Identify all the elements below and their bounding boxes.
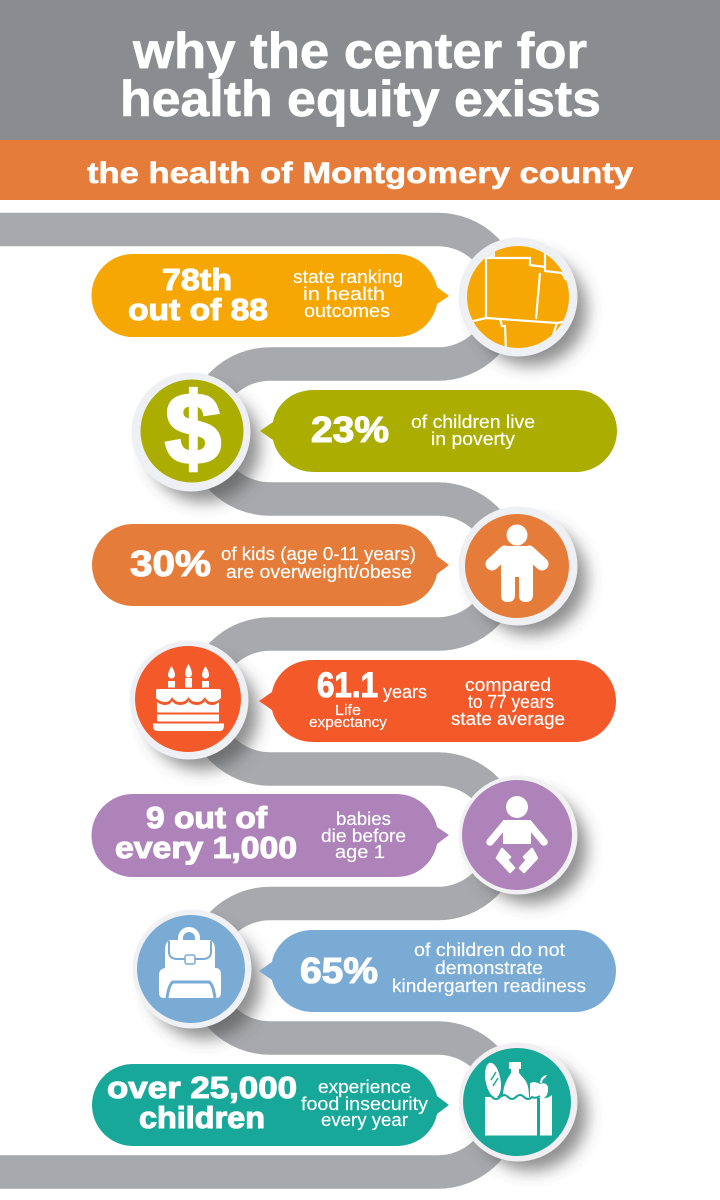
icon: child <box>458 506 578 626</box>
panel: infant mortality: babies <box>336 809 391 829</box>
panel: child poverty: 23% <box>311 409 389 450</box>
panel: infant mortality: die before <box>321 826 406 846</box>
panel: life expectancy: expectancy <box>309 714 388 731</box>
panel: food insecurity <box>92 1064 449 1146</box>
panel: life expectancy: Life <box>335 702 361 719</box>
panel: state ranking: outcomes <box>304 301 390 321</box>
panel: infant mortality <box>92 794 449 877</box>
panel: overweight kids <box>92 524 449 606</box>
header: title band: why the center for <box>132 23 587 79</box>
panel: child poverty: in poverty <box>431 429 515 449</box>
header: title band: health equity exists <box>120 71 601 127</box>
circle drop shadows <box>146 254 587 1171</box>
icon: dollar sign <box>132 372 250 492</box>
panel: life expectancy: compared <box>465 675 551 695</box>
panel: infant mortality: age 1 <box>335 842 385 862</box>
panel: infant mortality: 9 out of <box>146 800 268 835</box>
panel: overweight kids: 30% <box>130 543 211 584</box>
panel: state ranking: 78th <box>162 262 232 297</box>
panel: food insecurity: every year <box>321 1110 408 1130</box>
panel: child poverty <box>260 390 617 472</box>
panel: child poverty: of children live <box>411 412 535 432</box>
icon: county map <box>458 238 578 356</box>
icon: birthday cake <box>130 640 248 760</box>
panel: state ranking: out of 88 <box>128 292 268 327</box>
panel: kindergarten readiness: demonstrate <box>435 958 543 978</box>
icon: grocery bag <box>458 1042 578 1162</box>
panel: food insecurity: over 25,000 <box>107 1070 297 1105</box>
panel: infant mortality: every 1,000 <box>115 830 297 865</box>
panel: kindergarten readiness: 65% <box>300 950 378 991</box>
panel: food insecurity: children <box>139 1100 265 1135</box>
panel: kindergarten readiness: of children do not <box>414 940 565 960</box>
panel: state ranking: state ranking <box>293 267 403 287</box>
subheading band <box>0 140 720 200</box>
panel: life expectancy: years <box>383 682 427 702</box>
icon: backpack <box>132 910 252 1028</box>
panel: overweight kids: of kids (age 0-11 years) <box>221 544 416 564</box>
panel: life expectancy: state average <box>451 709 565 729</box>
panel: overweight kids: are overweight/obese <box>226 562 412 582</box>
panel: food insecurity: experience <box>318 1077 411 1097</box>
header: title band <box>0 0 720 140</box>
panel: life expectancy <box>259 660 616 742</box>
subheading band: the health of Montgomery county <box>87 157 633 190</box>
panel: state ranking: in health <box>303 284 385 304</box>
panel: kindergarten readiness: kindergarten readiness <box>392 976 586 996</box>
panel: life expectancy: 61.1 <box>317 666 378 705</box>
icon: baby <box>458 776 578 894</box>
winding road path <box>0 230 506 1172</box>
icon: dollar sign: $ <box>165 373 221 485</box>
panel: state ranking <box>92 254 449 337</box>
panel: food insecurity: food insecurity <box>301 1094 428 1114</box>
panel: kindergarten readiness <box>259 930 616 1012</box>
panel: life expectancy: to 77 years <box>468 692 554 712</box>
